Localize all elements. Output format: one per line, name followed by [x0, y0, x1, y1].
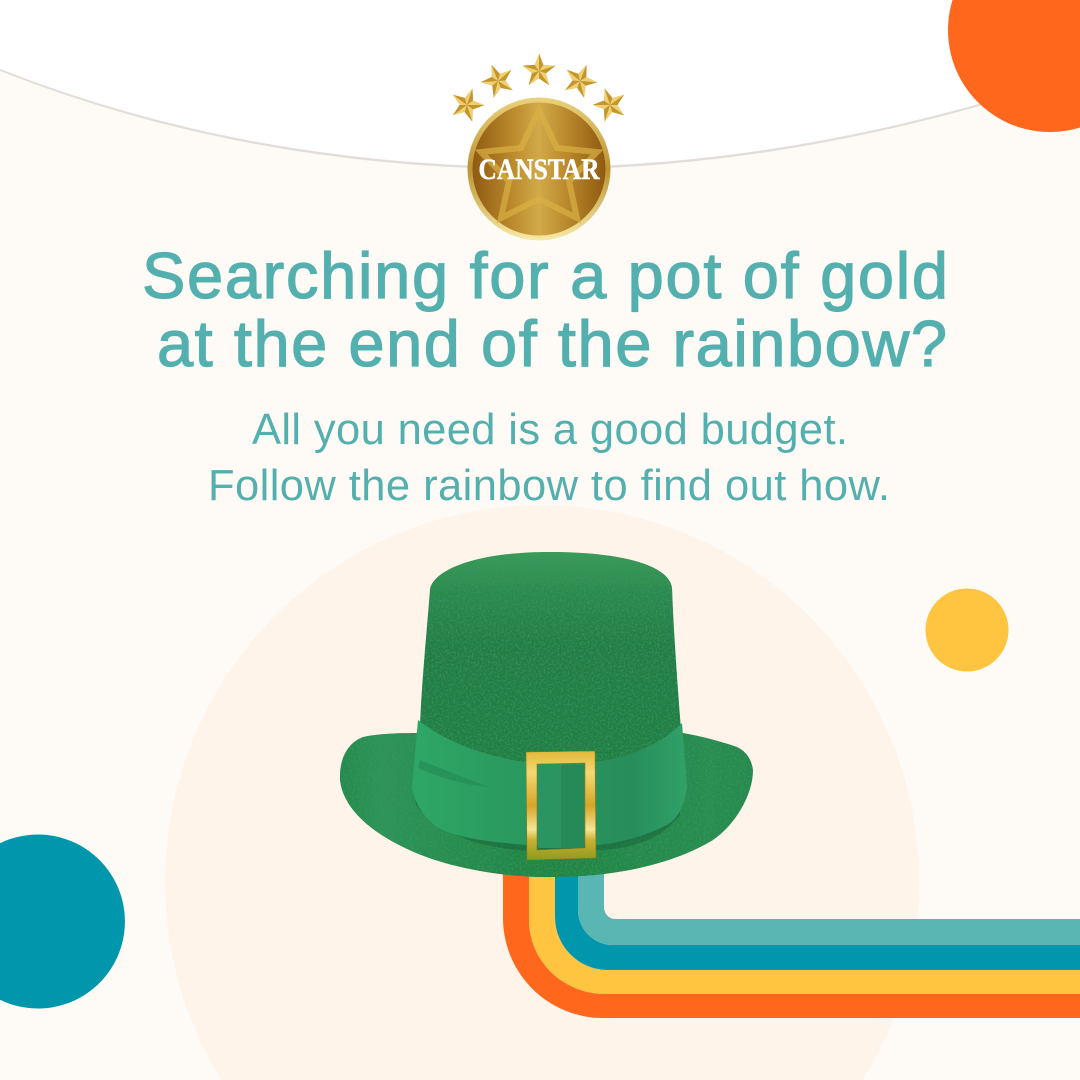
medal wordmark: CANSTAR	[478, 153, 600, 186]
large cream circle	[165, 505, 919, 1080]
subtitle: All you need is a good budget.	[252, 406, 848, 454]
icon: green leprechaun hat	[340, 552, 753, 877]
hat brim	[340, 733, 753, 877]
rainbow stripes	[503, 870, 1080, 1018]
title: Searching for a pot of gold	[142, 239, 948, 312]
title	[142, 239, 948, 380]
hat band	[412, 720, 687, 845]
medal disc	[468, 98, 610, 240]
decorative circle: orange top right	[948, 0, 1080, 132]
decorative circle: teal	[0, 834, 125, 1008]
subtitle	[208, 406, 890, 510]
gold buckle	[526, 751, 596, 860]
title: at the end of the rainbow?	[157, 307, 947, 380]
icon: Canstar five-star medal	[447, 54, 630, 240]
hat crown	[420, 552, 681, 790]
decorative circle: yellow	[926, 588, 1008, 672]
brim shadow under band	[415, 790, 680, 851]
icon: five gold stars	[447, 54, 630, 124]
band fold	[418, 760, 490, 787]
subtitle: Follow the rainbow to find out how.	[208, 462, 890, 510]
white top arc	[0, 0, 1080, 170]
